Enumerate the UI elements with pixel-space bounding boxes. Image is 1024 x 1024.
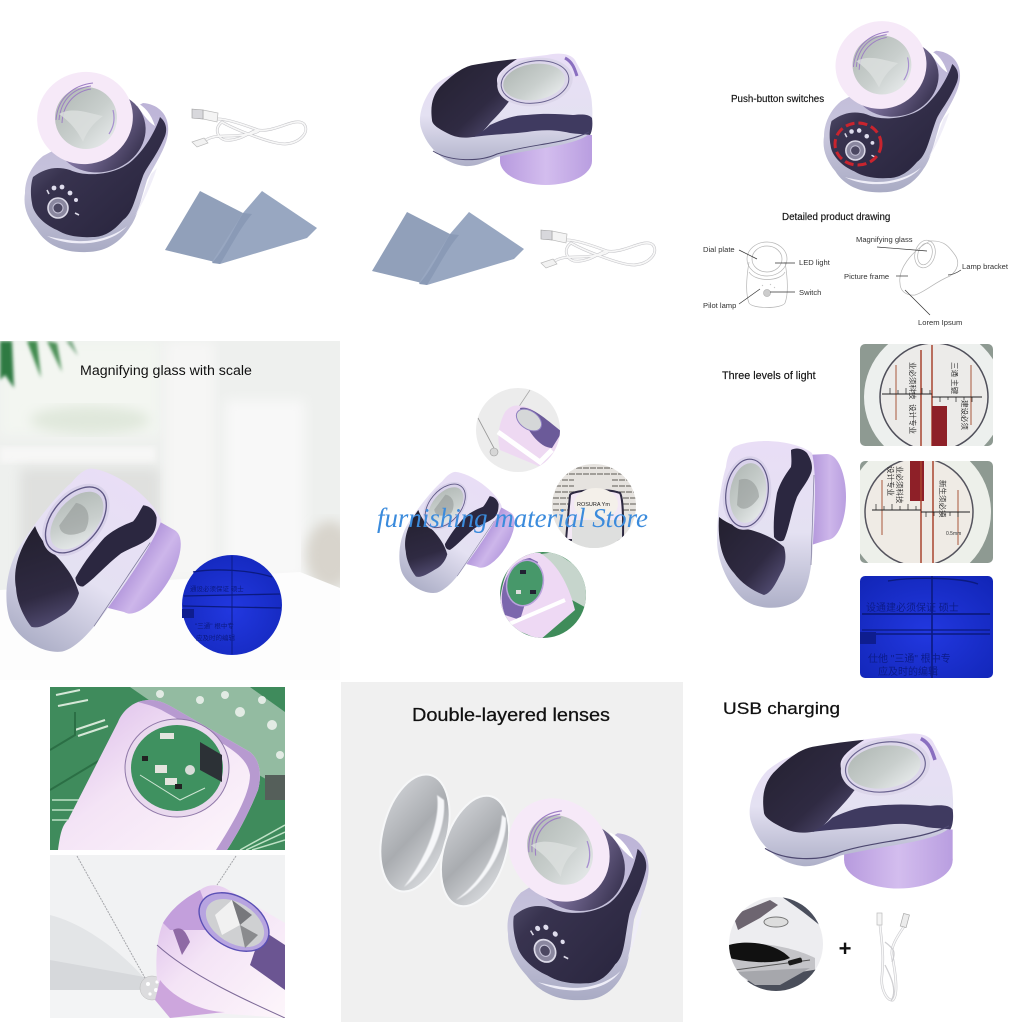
- usb cable: [192, 109, 306, 147]
- device top view: [420, 53, 592, 185]
- callout labels: Pilot lamp: [703, 301, 736, 310]
- heading: usb charging: USB charging: [723, 699, 840, 718]
- panel: product set upright: [24, 61, 317, 264]
- callout labels: Lorem Ipsum: [918, 318, 962, 327]
- device upright: [24, 61, 168, 252]
- inset: white light: 三通 主键: [950, 362, 960, 395]
- inset: warm light: 业必须科技: [895, 466, 905, 504]
- inset: white light: 建设必须: [960, 400, 970, 430]
- inset: blue light: 设通建必须保证 硕士: [866, 601, 959, 614]
- callout labels: [703, 235, 1009, 327]
- inset: warm light: 0.5mm: [946, 531, 961, 537]
- heading: magnifying glass with scale: Magnifying glass with scale: [80, 363, 252, 379]
- blurred room background: [0, 341, 340, 590]
- inset: blue light: [860, 576, 993, 678]
- line drawing: side view: [900, 238, 958, 295]
- lens disc 1: [369, 767, 461, 899]
- inset: white light: [860, 344, 993, 446]
- inset: white light: 业必须科技: [908, 362, 918, 400]
- plus sign: +: [839, 936, 851, 961]
- red dashed circle: [835, 123, 881, 165]
- heading: push-button switches: Push-button switches: [731, 94, 824, 105]
- callout arrows: [739, 247, 961, 315]
- photo: necklace: [50, 855, 285, 1018]
- inset: blue light: 应及时的编辑: [878, 665, 938, 678]
- inset: warm light: 设计专业: [886, 466, 896, 496]
- usb cable: [541, 230, 655, 268]
- device side view: [717, 441, 846, 608]
- line drawing: front view: [747, 242, 787, 308]
- inset: blue light: 仕他 "三通" 根中专: [868, 652, 951, 665]
- cleaning cloth: [165, 191, 317, 264]
- blue lens inset: [182, 555, 282, 655]
- panel: three usage circles with watermark: [377, 385, 648, 640]
- circle: newspaper: [552, 464, 636, 548]
- inset: warm light: 新生须必须: [938, 480, 948, 518]
- port close-up: [729, 897, 825, 991]
- blue lens inset: 应及时的编辑: [196, 633, 236, 642]
- device side view: [381, 461, 528, 617]
- panel: use on circuit board and necklace: [50, 687, 285, 1018]
- blue lens inset: "三通" 根中专: [195, 621, 234, 630]
- photo: circuit board: [50, 687, 285, 850]
- callout labels: Picture frame: [844, 272, 889, 281]
- device upright: [486, 786, 668, 1000]
- panel: three levels of light: [717, 327, 1004, 678]
- heading: double-layered lenses: Double-layered lenses: [412, 705, 610, 725]
- callout labels: Switch: [799, 288, 821, 297]
- watermark: furnishing material Store: [377, 503, 648, 533]
- panel: product set lying: [372, 53, 655, 285]
- circle: circuit board: [500, 552, 586, 638]
- circle: newspaper: ROSURA Ym: [577, 502, 610, 508]
- white table: [0, 572, 340, 680]
- cleaning cloth: [372, 212, 524, 285]
- inset: warm light: [860, 461, 993, 563]
- device with highlighted button: [824, 11, 960, 192]
- panel: usb charging: [723, 699, 953, 1001]
- blue lens inset: 通设必须保证 硕士: [190, 584, 244, 593]
- circle: necklace: [476, 388, 560, 472]
- lens disc 2: [429, 787, 521, 915]
- heading: three levels of light: Three levels of light: [722, 370, 816, 382]
- coiled cable: [877, 913, 909, 1001]
- grey background: [341, 682, 683, 1022]
- callout labels: Lamp bracket: [962, 262, 1009, 271]
- panel: double-layered lenses: [341, 682, 683, 1022]
- device top view: [750, 733, 953, 888]
- panel: push-button switches and product drawing: [703, 11, 1009, 327]
- inset: white light: 设计专业: [908, 404, 918, 434]
- callout labels: Magnifying glass: [856, 235, 913, 244]
- palm leaves: [0, 341, 78, 388]
- callout labels: LED light: [799, 258, 831, 267]
- heading: detailed product drawing: Detailed product drawing: [782, 212, 890, 223]
- panel: magnifying glass with scale: [0, 341, 340, 655]
- device side view: [6, 468, 181, 652]
- callout labels: Dial plate: [703, 245, 735, 254]
